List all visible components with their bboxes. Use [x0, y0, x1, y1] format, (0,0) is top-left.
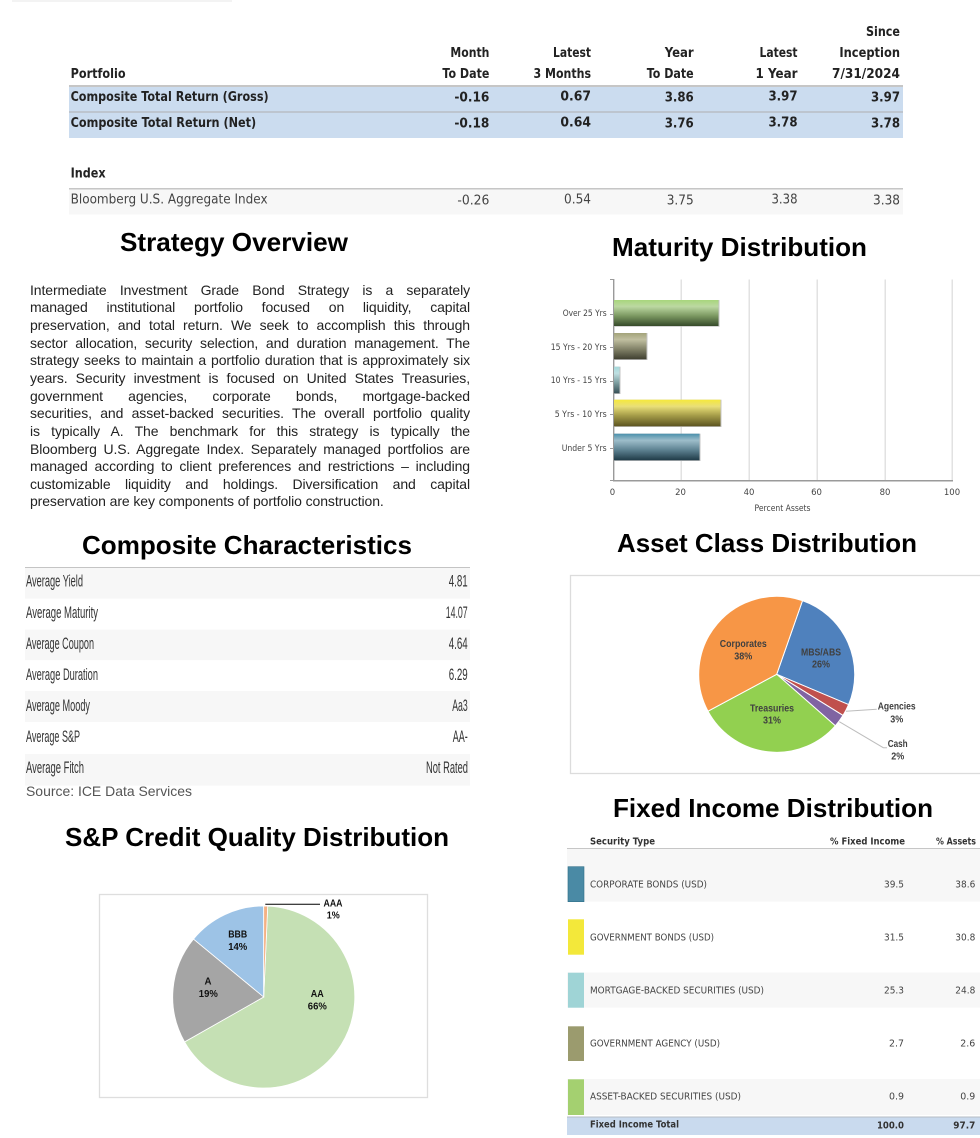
row: average coupon [26, 634, 468, 653]
row: average moody: Aa3 [452, 696, 468, 715]
row: average maturity [26, 603, 468, 622]
slice: AAA [264, 906, 268, 997]
row: asset-backed securities: 0.9 [960, 1092, 975, 1102]
category labels: 5 Yrs - 10 Yrs [555, 410, 607, 420]
text block: strategy description: years. Security investment is focused on United States Treasuries, [30, 370, 470, 386]
table header labels: Since [866, 24, 900, 40]
x axis labels: 100 [944, 488, 960, 498]
row: mortgage-backed securities: MORTGAGE-BACKED SECURITIES (USD) [590, 986, 764, 997]
row: average moody [26, 696, 468, 715]
pie chart: asset class distribution [570, 576, 980, 774]
leader line: AAA [265, 903, 320, 905]
slice: MBS/ABS [777, 601, 855, 705]
x axis labels: 0 [610, 488, 615, 498]
x axis labels: 40 [744, 488, 754, 498]
slice: corporates [699, 596, 802, 711]
row: corporate bonds: 38.6 [955, 880, 975, 890]
pie labels: A [204, 975, 212, 987]
row: average s&p [26, 727, 468, 746]
row: government agency: 2.7 [889, 1038, 904, 1050]
benchmark index values [71, 192, 900, 208]
row: average coupon: Average Coupon [26, 634, 94, 653]
text block: strategy description: Bloomberg U.S. Aggregate Index. Separately managed portfolios are [30, 440, 470, 456]
category labels [551, 309, 607, 454]
row band: benchmark index [69, 190, 903, 214]
row: fixed income total [567, 1116, 980, 1135]
slice: AA [185, 906, 355, 1088]
row: average yield [26, 572, 468, 590]
slice: cash [777, 674, 843, 726]
bar: 10 to 15 years [614, 367, 620, 394]
row: average s&p: AA- [453, 727, 468, 746]
net return values: 3.78 [768, 114, 798, 130]
x axis labels: 80 [880, 488, 890, 498]
row: fixed income total: 100.0 [877, 1120, 904, 1131]
x axis labels [610, 488, 960, 514]
row: corporate bonds [568, 867, 975, 902]
table header labels: Latest [760, 45, 798, 61]
heading: strategy overview: Strategy Overview [120, 227, 349, 257]
text block: strategy description: government agencies, corporate bonds, mortgage-backed [30, 388, 470, 404]
table: portfolio and index returns [69, 24, 903, 214]
pie labels: 66% [308, 1001, 327, 1013]
row: average duration: 6.29 [449, 665, 468, 684]
row: government agency [568, 1026, 975, 1061]
row: average fitch: Average Fitch [26, 758, 84, 777]
row: average yield: Average Yield [26, 572, 83, 590]
table: composite characteristics [25, 567, 470, 786]
heading: composite characteristics: Composite Characteristics [82, 530, 412, 560]
row: fixed income total: Fixed Income Total [590, 1120, 679, 1130]
gross return values [71, 88, 900, 106]
table header labels: Month [450, 45, 489, 61]
row: average maturity: 14.07 [446, 603, 468, 622]
row: government agency: 2.6 [960, 1038, 975, 1050]
pie labels: MBS/ABS [801, 646, 841, 658]
slice: A [173, 939, 264, 1042]
text block: strategy description: managed according to client preferences and restrictions – including [30, 458, 470, 474]
benchmark index values: 3.75 [667, 192, 694, 208]
row: asset-backed securities: ASSET-BACKED SECURITIES (USD) [590, 1092, 741, 1102]
table header [590, 836, 976, 848]
benchmark index values: 3.38 [873, 192, 900, 208]
net return values: 3.76 [665, 116, 694, 132]
benchmark index values: 0.54 [564, 192, 591, 208]
row: average s&p: Average S&P [26, 727, 80, 746]
row: average yield: 4.81 [449, 572, 468, 590]
slice: treasuries [708, 674, 835, 752]
bar: under 5 years [614, 434, 700, 461]
pie chart: s&p credit quality [100, 894, 428, 1098]
pie labels: AAA [324, 897, 343, 909]
heading: asset class distribution: Asset Class Distribution [617, 528, 917, 558]
net return values: -0.18 [454, 116, 489, 132]
gross return values: 3.97 [768, 88, 798, 104]
index heading: Index [71, 166, 106, 182]
row band: gross return [69, 87, 903, 111]
text block: strategy description: managed institutional portfolio focused on liquidity, capital [30, 299, 470, 315]
category labels: Over 25 Yrs [563, 309, 607, 319]
heading: s&p credit quality distribution: S&P Credit Quality Distribution [65, 822, 449, 852]
table header labels: Year [664, 45, 694, 61]
row: corporate bonds: 39.5 [884, 880, 904, 890]
pie labels: 38% [734, 651, 753, 663]
row band: net return [69, 113, 903, 138]
net return values: Composite Total Return (Net) [71, 115, 256, 131]
bar: 5 to 10 years [614, 400, 722, 427]
heading: fixed income distribution: Fixed Income Distribution [613, 793, 933, 823]
text block: strategy description: Intermediate Investment Grade Bond Strategy is a separately [30, 282, 470, 298]
table header labels: 3 Months [534, 66, 591, 82]
pie labels: Cash [888, 738, 908, 750]
row: asset-backed securities: 0.9 [889, 1092, 904, 1102]
pie labels: 26% [812, 659, 831, 671]
pie labels: 3% [890, 713, 904, 725]
net return values: 0.64 [560, 114, 591, 130]
row: average coupon: 4.64 [449, 634, 468, 653]
benchmark index values: 3.38 [772, 192, 798, 208]
bar chart: maturity distribution [551, 279, 960, 514]
heading: maturity distribution: Maturity Distribution [612, 232, 867, 262]
table header labels [71, 24, 900, 82]
table header labels: Inception [839, 45, 900, 61]
x axis labels: 60 [811, 488, 822, 498]
pie labels: AA [311, 988, 324, 1000]
text block: strategy description [30, 282, 470, 514]
pie labels: 19% [199, 988, 218, 1000]
gross return values: -0.16 [454, 90, 489, 106]
text block: strategy description: preservation are key components of portfolio construction. [30, 493, 384, 509]
net return values [71, 114, 900, 132]
row: average maturity: Average Maturity [26, 603, 98, 622]
leader lines [839, 709, 887, 748]
category labels: Under 5 Yrs [562, 444, 607, 454]
bar: 15 to 20 years [614, 333, 648, 360]
benchmark index values: Bloomberg U.S. Aggregate Index [71, 192, 268, 208]
row: average duration: Average Duration [26, 665, 98, 684]
row: government bonds: 30.8 [955, 933, 975, 944]
row: fixed income total: 97.7 [953, 1120, 975, 1131]
table header labels: To Date [442, 66, 489, 82]
net return values: 3.78 [871, 116, 900, 132]
row: average moody: Average Moody [26, 696, 90, 715]
row: corporate bonds: CORPORATE BONDS (USD) [590, 880, 707, 890]
text block: strategy description: customizable liquidity and holdings. Diversification and capital [30, 476, 470, 492]
table header: Security Type [590, 836, 655, 848]
row: average duration [26, 665, 468, 684]
table header labels: 1 Year [756, 66, 798, 82]
table header: % Fixed Income [830, 836, 905, 848]
pie labels [720, 638, 916, 763]
source note: Source: ICE Data Services [26, 783, 192, 799]
row: asset-backed securities [568, 1079, 975, 1115]
row: mortgage-backed securities: 24.8 [955, 986, 975, 997]
text block: strategy description: sector allocation, security selection, and duration management. The [30, 335, 470, 351]
text block: strategy description: strategy seeks to maintain a portfolio duration that is approximately six [30, 352, 470, 368]
category labels: 10 Yrs - 15 Yrs [551, 376, 607, 386]
table header labels: 7/31/2024 [832, 66, 900, 82]
pie labels: BBB [228, 928, 248, 940]
gross return values: 3.97 [871, 90, 900, 106]
row: average fitch [26, 758, 468, 777]
slice: BBB [194, 906, 264, 997]
table header labels: Latest [553, 45, 591, 61]
pie labels: Agencies [878, 701, 916, 713]
benchmark index values: -0.26 [457, 192, 489, 208]
pie labels: Treasuries [750, 703, 794, 715]
gross return values: 0.67 [560, 88, 591, 104]
pie labels: 31% [763, 715, 782, 727]
category labels: 15 Yrs - 20 Yrs [551, 343, 607, 353]
table header labels: To Date [647, 66, 694, 82]
table: fixed income distribution [567, 836, 980, 1135]
row: government agency: GOVERNMENT AGENCY (USD) [590, 1038, 720, 1050]
axes [610, 279, 953, 482]
row: government bonds [568, 919, 975, 955]
gross return values: 3.86 [665, 90, 694, 106]
pie labels [199, 897, 343, 1013]
slice: agencies [777, 674, 849, 715]
pie labels: 1% [327, 910, 340, 922]
text block: strategy description: is typically A. The benchmark for this strategy is typically the [30, 423, 470, 439]
row: mortgage-backed securities [568, 973, 975, 1008]
pie labels: Corporates [720, 638, 767, 650]
table header labels: Portfolio [71, 66, 126, 82]
row: average fitch: Not Rated [426, 758, 468, 777]
pie labels: 14% [228, 941, 248, 953]
row: government bonds: 31.5 [884, 933, 904, 944]
gross return values: Composite Total Return (Gross) [71, 89, 269, 105]
row: mortgage-backed securities: 25.3 [884, 986, 904, 997]
bar: over 25 years [614, 300, 720, 327]
text block: strategy description: preservation, and total return. We seek to accomplish this through [30, 317, 470, 333]
pie labels: 2% [891, 751, 905, 763]
text block: strategy description: securities, and asset-backed securities. The overall portfolio quality [30, 405, 470, 421]
row: government bonds: GOVERNMENT BONDS (USD) [590, 933, 714, 944]
x axis labels: Percent Assets [754, 504, 811, 514]
x axis labels: 20 [675, 488, 686, 498]
